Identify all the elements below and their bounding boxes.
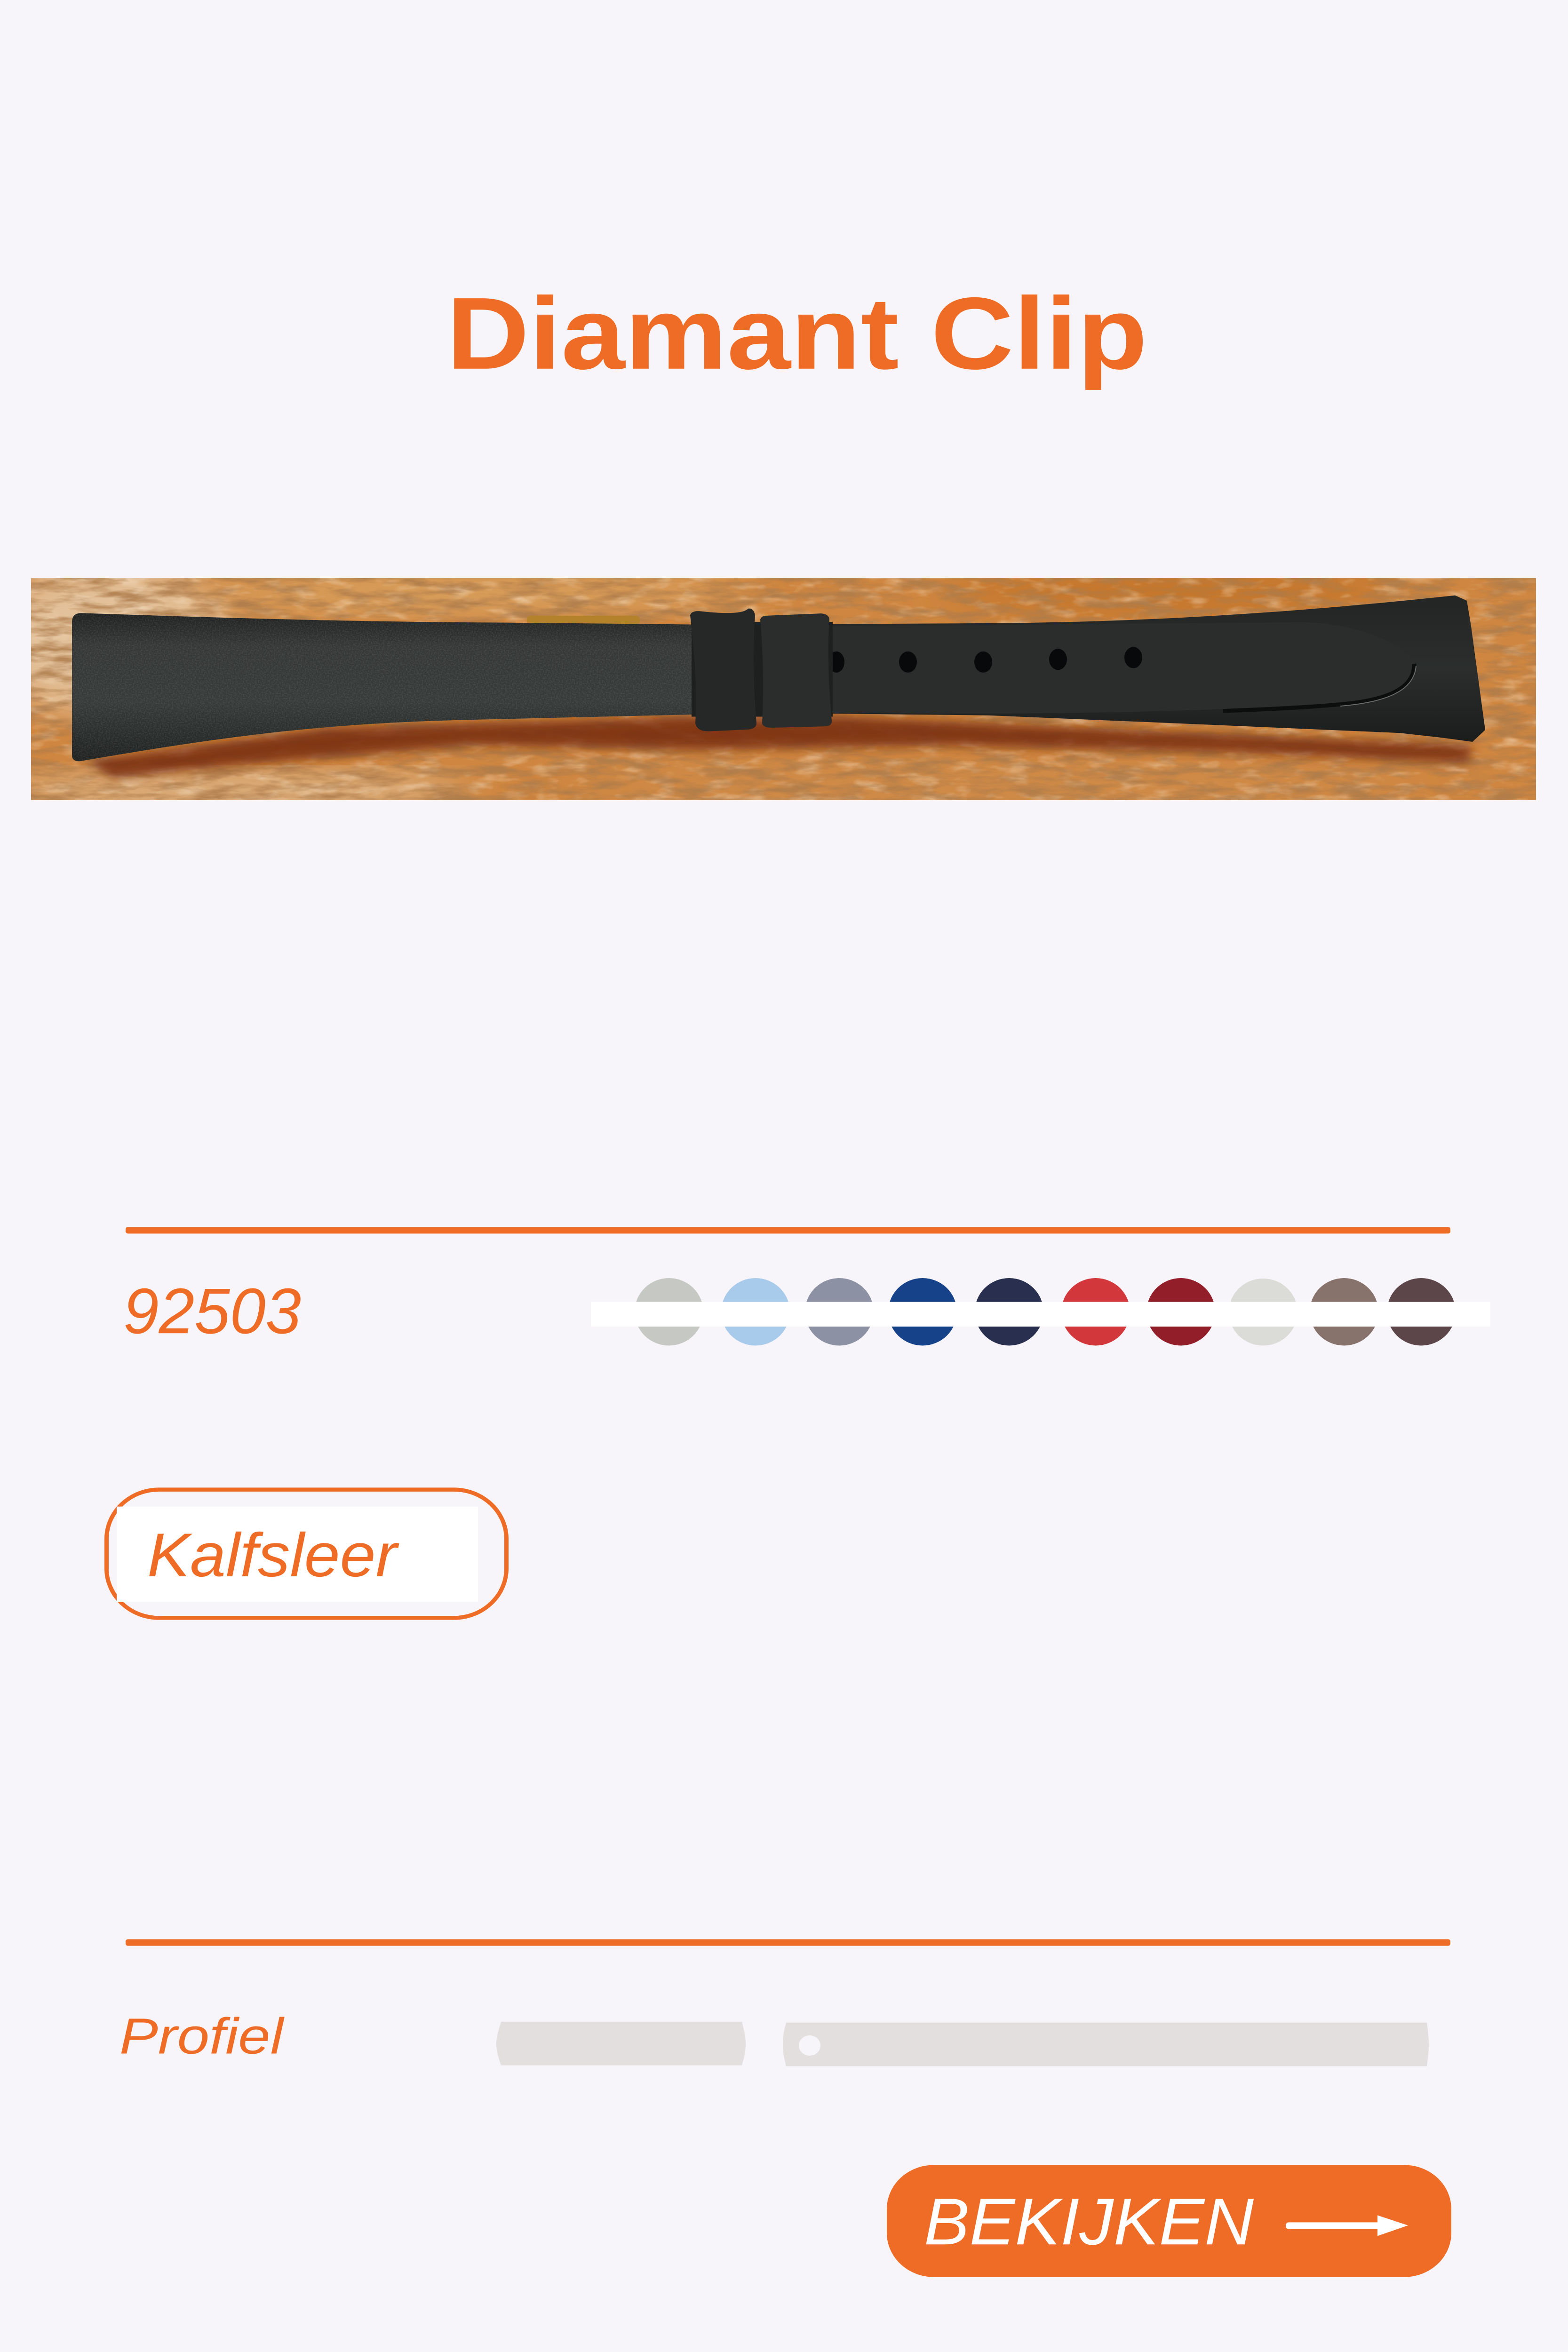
material tag: Kalfsleer bbox=[147, 1520, 399, 1589]
profile shape: short piece bbox=[496, 2022, 746, 2066]
material tag bbox=[106, 1490, 506, 1618]
article number: 92503 bbox=[123, 1275, 301, 1347]
gold buckle pin bbox=[527, 616, 640, 625]
strap short piece bbox=[828, 596, 1485, 742]
icon: arrow bbox=[1286, 2215, 1408, 2236]
colour swatches bbox=[591, 1278, 1490, 1345]
strap shadow on wood bbox=[85, 717, 1472, 779]
title: Diamant Clip bbox=[446, 276, 1147, 390]
product photo: leather strap on wood bbox=[31, 578, 1536, 800]
button: bekijken: BEKIJKEN bbox=[924, 2185, 1254, 2258]
divider line top bbox=[126, 1227, 1450, 1233]
strap tongue with holes bbox=[833, 647, 1417, 713]
strap long piece bbox=[72, 613, 696, 761]
profile label: Profiel bbox=[119, 2008, 285, 2064]
profile shape: long piece with hole bbox=[783, 2023, 1429, 2066]
divider line bottom bbox=[126, 1939, 1450, 1946]
strap keepers bbox=[690, 609, 833, 731]
strap long piece leather texture bbox=[72, 613, 696, 761]
button: bekijken bbox=[887, 2165, 1451, 2277]
wood background bbox=[31, 578, 1536, 800]
